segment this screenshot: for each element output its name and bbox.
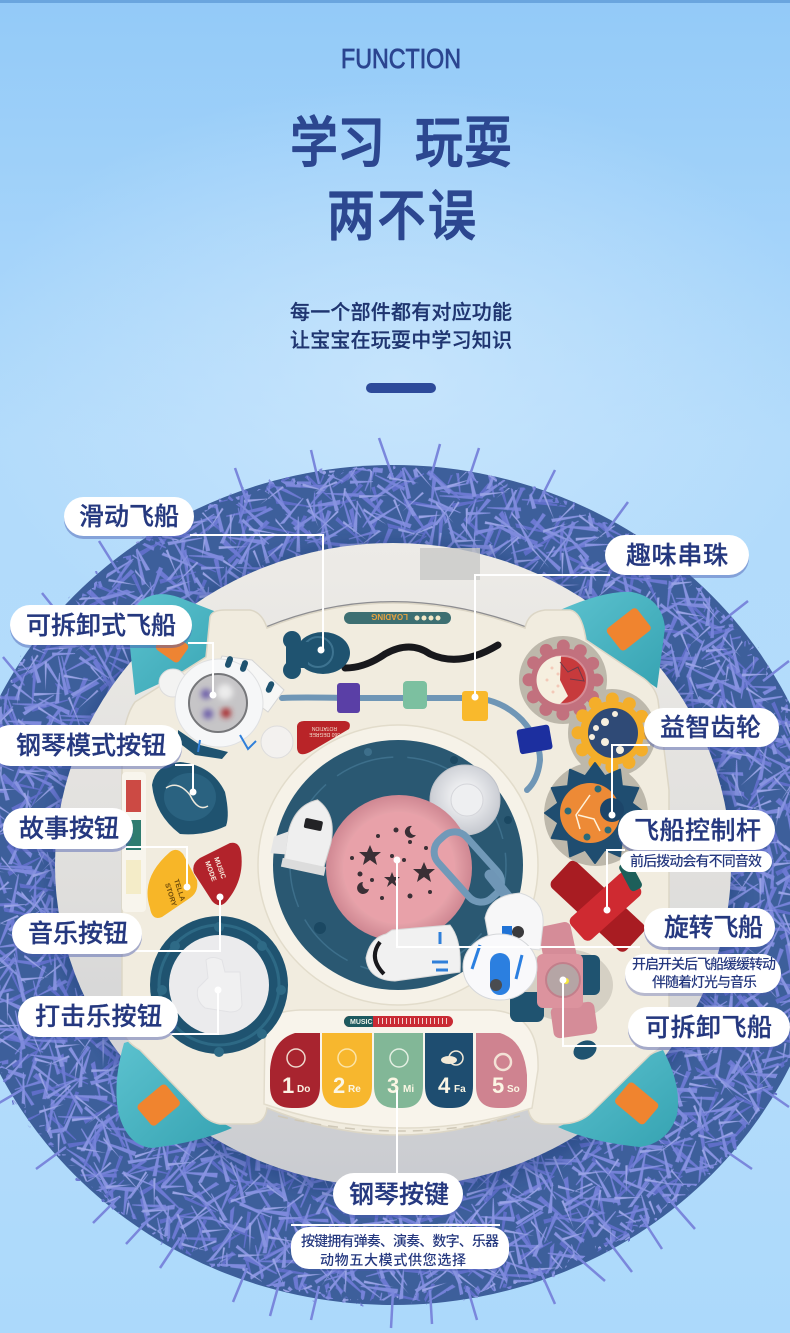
title: 玩耍 xyxy=(415,112,512,174)
key 3 Mi xyxy=(374,1033,423,1108)
key 4 Fa: 4 xyxy=(438,1073,451,1098)
beads xyxy=(337,681,553,755)
music button: red xyxy=(193,843,242,905)
bead rope xyxy=(282,698,540,790)
story button: yellow: TELLA xyxy=(172,878,186,902)
rug xyxy=(0,400,790,1333)
story button: yellow xyxy=(148,850,197,918)
music strip: MUSIC xyxy=(350,1019,373,1026)
label: 钢琴按键: 钢琴按键 xyxy=(349,1181,449,1209)
label: 飞船控制杆: 飞船控制杆 xyxy=(634,817,761,845)
gear: pink xyxy=(529,646,597,714)
central dial xyxy=(258,725,538,1005)
label: 故事按钮: 故事按钮 xyxy=(19,815,119,843)
key 5 So xyxy=(476,1033,527,1108)
percussion drum xyxy=(150,916,288,1057)
label: 滑动飞船 xyxy=(64,497,194,539)
label: 旋转飞船 xyxy=(644,908,775,950)
label: 故事按钮 xyxy=(3,808,133,852)
key 3 Mi: 3 xyxy=(387,1073,399,1098)
icon: white astronaut xyxy=(366,925,460,981)
note: 前后拨动会有不同音效: 前后拨动会有不同音效 xyxy=(630,853,762,869)
slide track with black slot xyxy=(344,612,498,668)
subtitle: 每一个部件都有对应功能 xyxy=(290,301,512,324)
handle: bottom left xyxy=(116,1040,232,1148)
label: 可拆卸飞船 xyxy=(628,1007,790,1050)
label: 音乐按钮: 音乐按钮 xyxy=(28,920,128,948)
key 1 Do: Do xyxy=(297,1084,310,1095)
pink planet disc xyxy=(326,795,472,941)
side story cards xyxy=(122,772,146,912)
handle: top left xyxy=(130,594,232,695)
red rotation label: 360 DEGREE xyxy=(308,731,340,737)
key 5 So: So xyxy=(507,1084,520,1095)
label: 趣味串珠 xyxy=(605,535,749,578)
red rotation label: ROTATION xyxy=(312,725,337,731)
icon: white rocket xyxy=(268,793,339,876)
subtitle xyxy=(290,301,512,352)
key 2 Re: 2 xyxy=(333,1073,345,1098)
label: 钢琴模式按钮 xyxy=(0,725,182,769)
icon: white robot xyxy=(463,893,543,1000)
piano keys xyxy=(270,1033,527,1108)
label: 钢琴按键 xyxy=(333,1173,463,1218)
callout lines xyxy=(125,535,650,1225)
icon: pink spaceship xyxy=(510,921,600,1039)
edge strands xyxy=(0,438,789,1328)
key 5 So: 5 xyxy=(492,1073,504,1098)
subtitle: 让宝宝在玩耍中学习知识 xyxy=(290,329,512,352)
key 2 Re xyxy=(322,1033,372,1108)
icon: sliding spaceship xyxy=(283,631,350,679)
label: 趣味串珠: 趣味串珠 xyxy=(626,542,728,570)
label: 飞船控制杆 xyxy=(618,810,775,853)
label: 打击乐按钮 xyxy=(18,996,178,1040)
music button: red: MODE xyxy=(203,860,217,883)
label: 可拆卸式飞船: 可拆卸式飞船 xyxy=(26,612,176,640)
music strip xyxy=(344,1016,453,1027)
handle: top right xyxy=(560,592,665,688)
slide track with black slot: LOADING xyxy=(371,612,408,621)
title: 学习 xyxy=(290,112,385,174)
key 1 Do xyxy=(270,1033,320,1108)
label: 益智齿轮 xyxy=(644,708,779,750)
heading: FUNCTION: FUNCTION xyxy=(341,43,461,74)
silver dome xyxy=(430,765,500,835)
gear recesses xyxy=(519,636,656,866)
note: 按键拥有弹奏: 按键拥有弹奏、演奏、数字、乐器 xyxy=(301,1233,499,1249)
label: 益智齿轮: 益智齿轮 xyxy=(660,714,761,742)
key 4 Fa: Fa xyxy=(454,1084,466,1095)
label: 音乐按钮 xyxy=(12,913,142,957)
note: 开启开关后飞船缓缓转动 xyxy=(625,954,781,996)
key 3 Mi: Mi xyxy=(403,1084,414,1095)
label: 可拆卸飞船: 可拆卸飞船 xyxy=(645,1014,772,1042)
accent bar xyxy=(366,383,436,393)
icon: red propeller spaceship xyxy=(548,858,647,954)
story button: yellow: STORY xyxy=(163,882,177,907)
key 4 Fa xyxy=(425,1033,473,1108)
label: 旋转飞船: 旋转飞船 xyxy=(664,914,763,942)
key 1 Do: 1 xyxy=(282,1073,294,1098)
red rotation label xyxy=(297,721,350,754)
table top xyxy=(55,543,731,1187)
title: 两不误 xyxy=(327,185,476,247)
note: 开启开关后飞船缓缓转动: 伴随着灯光与音乐 xyxy=(652,974,757,990)
rug shadow xyxy=(48,540,738,1200)
recess: pink spaceship xyxy=(519,949,613,1021)
label: 可拆卸式飞船 xyxy=(10,605,192,648)
label: 打击乐按钮: 打击乐按钮 xyxy=(35,1003,162,1031)
label: 钢琴模式按钮: 钢琴模式按钮 xyxy=(16,732,166,760)
note: 前后拨动会有不同音效 xyxy=(620,851,772,872)
icon: removable spaceship xyxy=(159,655,293,759)
blue handle lever xyxy=(428,825,522,915)
note: 按键拥有弹奏: 动物五大模式供您选择 xyxy=(320,1252,466,1268)
small navy switch xyxy=(570,1037,600,1063)
note: 按键拥有弹奏 xyxy=(291,1227,509,1271)
gear: yellow xyxy=(578,699,646,767)
music button: red: MUSIC xyxy=(212,856,226,880)
toy table body xyxy=(122,603,669,1135)
gear: navy with orange face xyxy=(545,763,645,863)
key 2 Re: Re xyxy=(348,1084,361,1095)
handle: bottom right xyxy=(558,1050,678,1147)
title xyxy=(290,112,512,247)
piano mode button xyxy=(152,762,228,834)
label: 滑动飞船: 滑动飞船 xyxy=(79,503,179,531)
note: 开启开关后飞船缓缓转动: 开启开关后飞船缓缓转动 xyxy=(632,956,776,972)
